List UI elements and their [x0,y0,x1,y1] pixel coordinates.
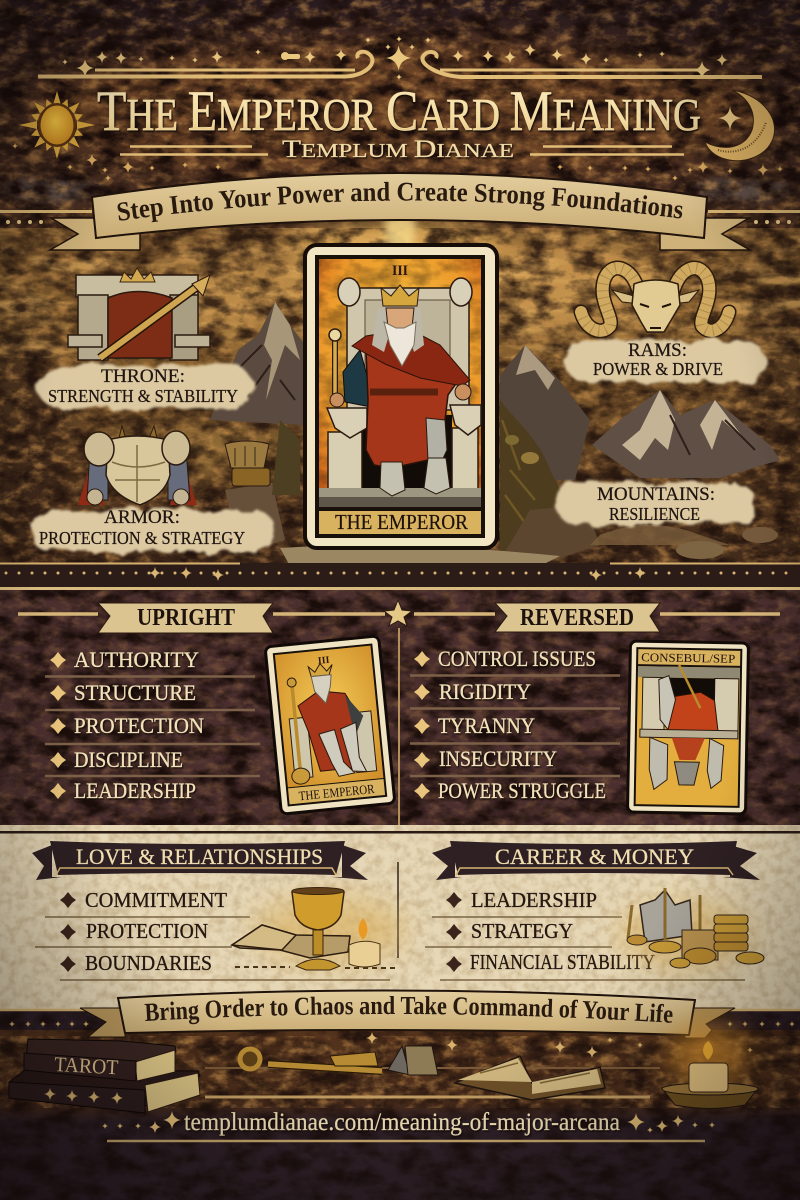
list: reversed: RIGIDITY [439,679,531,704]
label: mountains: RESILIENCE [609,504,700,524]
emperor figure [330,285,471,496]
card numeral: III [392,263,408,279]
list: career [425,888,745,980]
card: reversed [628,641,748,814]
icon: armor [78,426,197,505]
mountains: left peak [210,302,305,425]
subtitle [120,136,684,163]
list: reversed: TYRANNY [438,713,535,738]
ribbon tails: bottom [80,1008,735,1038]
list: love [35,888,390,980]
list: upright: AUTHORITY [74,647,199,672]
label: armor: ARMOR: [104,507,180,528]
scepter [329,329,341,402]
list: reversed: INSECURITY [439,746,557,771]
list: career: STRATEGY [471,919,573,943]
banner: tagline [91,172,708,240]
list: reversed: POWER STRUGGLE [438,778,606,803]
heading: reversed: REVERSED [520,605,634,631]
label: throne [38,366,253,408]
heading: upright: UPRIGHT [137,605,235,631]
label: mountains [555,482,755,524]
icon: wheat sheaf [225,441,270,486]
banner: love and relationships: LOVE & RELATIONSHIPS [76,844,323,869]
icon: goblet, book and candle [232,888,405,970]
card title: THE EMPEROR [335,510,468,534]
icon: candle on plate [662,1023,758,1108]
icon: open book [455,1056,605,1100]
label: armor [30,507,275,552]
icon: center star [384,600,412,626]
banner: love and relationships [32,841,368,880]
panel: love and career [0,825,800,1011]
label: armor: PROTECTION & STRATEGY [39,528,245,548]
list: love: COMMITMENT [85,888,227,912]
panel: upright and reversed [0,590,800,826]
label: rams: POWER & DRIVE [593,359,723,379]
icon: tarot books [9,1039,200,1113]
list: reversed: CONTROL ISSUES [438,646,596,671]
panel: footer [0,990,800,1200]
label: mountains: MOUNTAINS: [597,484,715,505]
url: templumdianae.com/meaning-of-major-arcana [184,1109,620,1136]
icon: sun [19,91,95,159]
icon: golden key [240,1049,382,1071]
top ribbon tails [50,218,750,250]
icon: scales and coins [620,888,764,968]
list: love: PROTECTION [86,919,208,943]
label: throne: STRENGTH & STABILITY [48,386,238,406]
icon: tarot books: TAROT [54,1052,119,1079]
throne [319,278,481,507]
label: throne: THRONE: [101,366,185,387]
banner: career and money [432,841,760,880]
list: upright: LEADERSHIP [74,778,196,803]
list: upright: STRUCTURE [74,680,196,705]
label: rams: RAMS: [628,340,687,361]
card: upright: THE EMPEROR [298,781,375,803]
foreground bushes and rocks [225,400,778,566]
title: THE EMPEROR CARD MEANING [97,80,701,143]
card: the emperor [305,245,497,548]
icon: crescent moon [705,90,775,161]
list: upright [45,647,260,803]
url [102,1109,715,1141]
side bands beside ribbon [0,212,800,234]
icon: throne [68,268,210,360]
banner: career and money: CAREER & MONEY [495,844,694,869]
list: career: FINANCIAL STABILITY [470,950,655,974]
card: reversed: CONSEBUL/SEP [641,650,736,666]
card: upright: III [317,655,330,667]
subtitle: TEMPLUM DIANAE [282,136,514,163]
label: rams [565,340,765,382]
list: love: BOUNDARIES [85,951,212,975]
list: career: LEADERSHIP [471,888,597,912]
banner: tagline: Step Into Your Power and Create Strong Foundations [118,182,682,222]
mountains: right near peak [500,345,590,480]
list: upright: PROTECTION [74,713,204,738]
icon: small scale [388,1046,438,1075]
heading: upright [98,603,273,633]
mountains: right range [592,390,780,478]
divider band [0,563,800,590]
banner: closing line: Bring Order to Chaos and Take Command of Your Life [144,996,672,1024]
card: upright [265,636,395,814]
scattered stars [12,143,783,181]
list: reversed [410,646,620,803]
top ornament [38,36,762,80]
list: upright: DISCIPLINE [74,747,183,772]
icon: ram head [581,268,729,332]
